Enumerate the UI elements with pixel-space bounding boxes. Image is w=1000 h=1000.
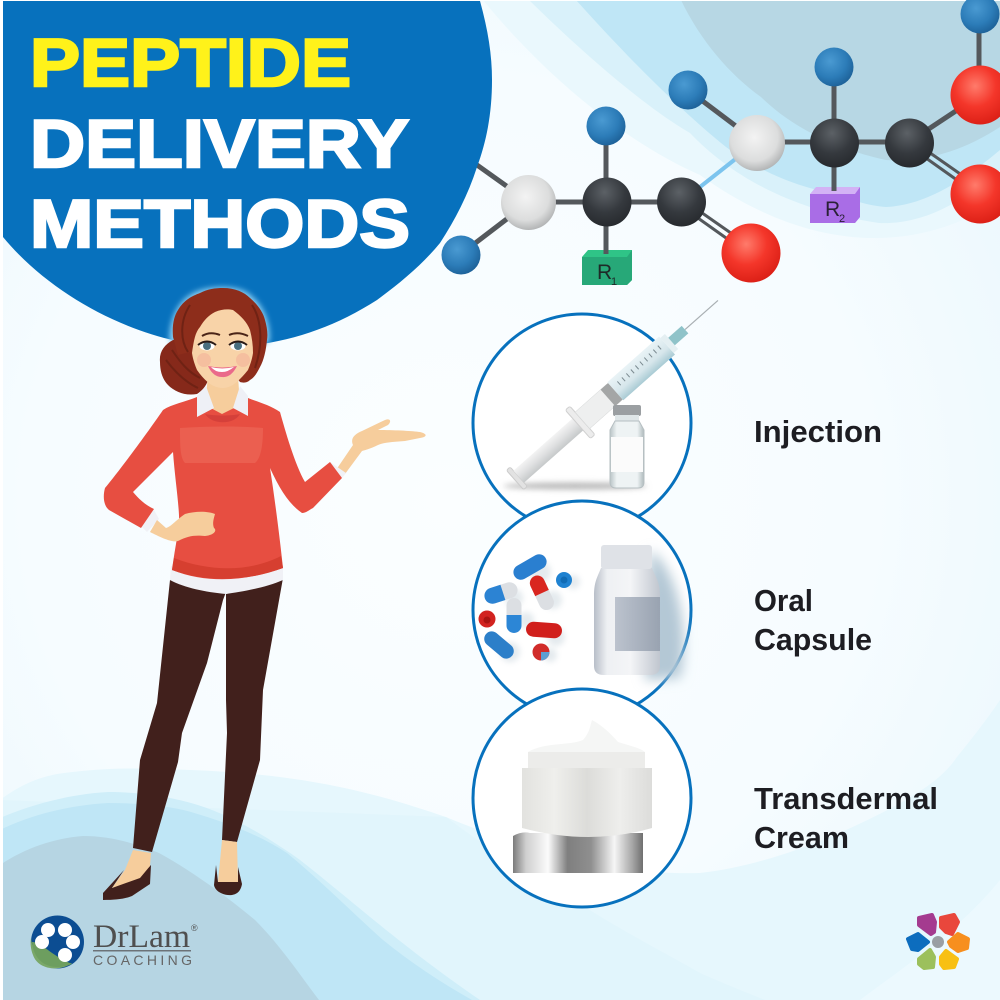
label: Transdermal Cream	[754, 781, 938, 855]
label: Oral Capsule: Capsule	[754, 622, 872, 657]
icon: color flower	[908, 915, 968, 968]
cube R1	[582, 240, 632, 288]
logo mark	[31, 916, 84, 968]
legs	[133, 578, 283, 852]
hair bun	[160, 340, 208, 395]
cube R1: 1	[611, 276, 617, 288]
cube R2: 2	[839, 213, 845, 225]
logo: DrLam Coaching: ®	[191, 923, 198, 933]
label: Transdermal Cream: Transdermal	[754, 781, 938, 816]
label: Transdermal Cream: Cream	[754, 820, 849, 855]
sweater hem shade	[172, 556, 283, 579]
neckline shade	[205, 414, 240, 422]
peptide bond	[681, 142, 757, 202]
circle: oral capsule	[473, 501, 691, 719]
neck	[205, 376, 240, 414]
logo: DrLam Coaching	[31, 916, 198, 968]
icon: vial	[610, 405, 644, 488]
cuffs	[139, 510, 159, 532]
hair	[173, 288, 267, 383]
title line 1: PEPTIDE	[30, 25, 351, 101]
label: Oral Capsule	[754, 583, 872, 657]
head glow	[172, 290, 267, 350]
cube R1: R	[597, 261, 612, 284]
right hand	[336, 419, 426, 474]
left hand	[150, 512, 215, 541]
face	[192, 309, 253, 388]
logo: DrLam Coaching: COACHING	[93, 952, 192, 968]
label: Oral Capsule: Oral	[754, 583, 813, 618]
circle: transdermal cream	[473, 689, 691, 907]
logo wordmark: DrLam	[93, 919, 190, 955]
cube R2: R	[825, 198, 840, 221]
title banner	[3, 1, 492, 347]
label: Injection: Injection	[754, 414, 882, 449]
circle: injection	[473, 286, 731, 532]
hair strands	[166, 305, 260, 388]
title line 3: METHODS	[30, 186, 410, 262]
feet	[103, 840, 242, 900]
atoms	[442, 0, 1000, 282]
icon: syringe	[502, 286, 731, 494]
icon: pills	[478, 552, 580, 662]
molecule diagram	[442, 0, 1000, 288]
woman illustration	[103, 288, 426, 900]
collar	[197, 386, 248, 417]
shirt hem	[170, 566, 283, 594]
bonds	[461, 14, 980, 258]
sweater	[104, 397, 342, 579]
sweater chest highlight	[180, 426, 263, 463]
cube R2	[810, 165, 860, 225]
title line 2: DELIVERY	[30, 106, 409, 182]
pill shadows	[500, 561, 580, 662]
icon: bottle	[594, 545, 684, 680]
icon: cream jar	[513, 720, 652, 873]
